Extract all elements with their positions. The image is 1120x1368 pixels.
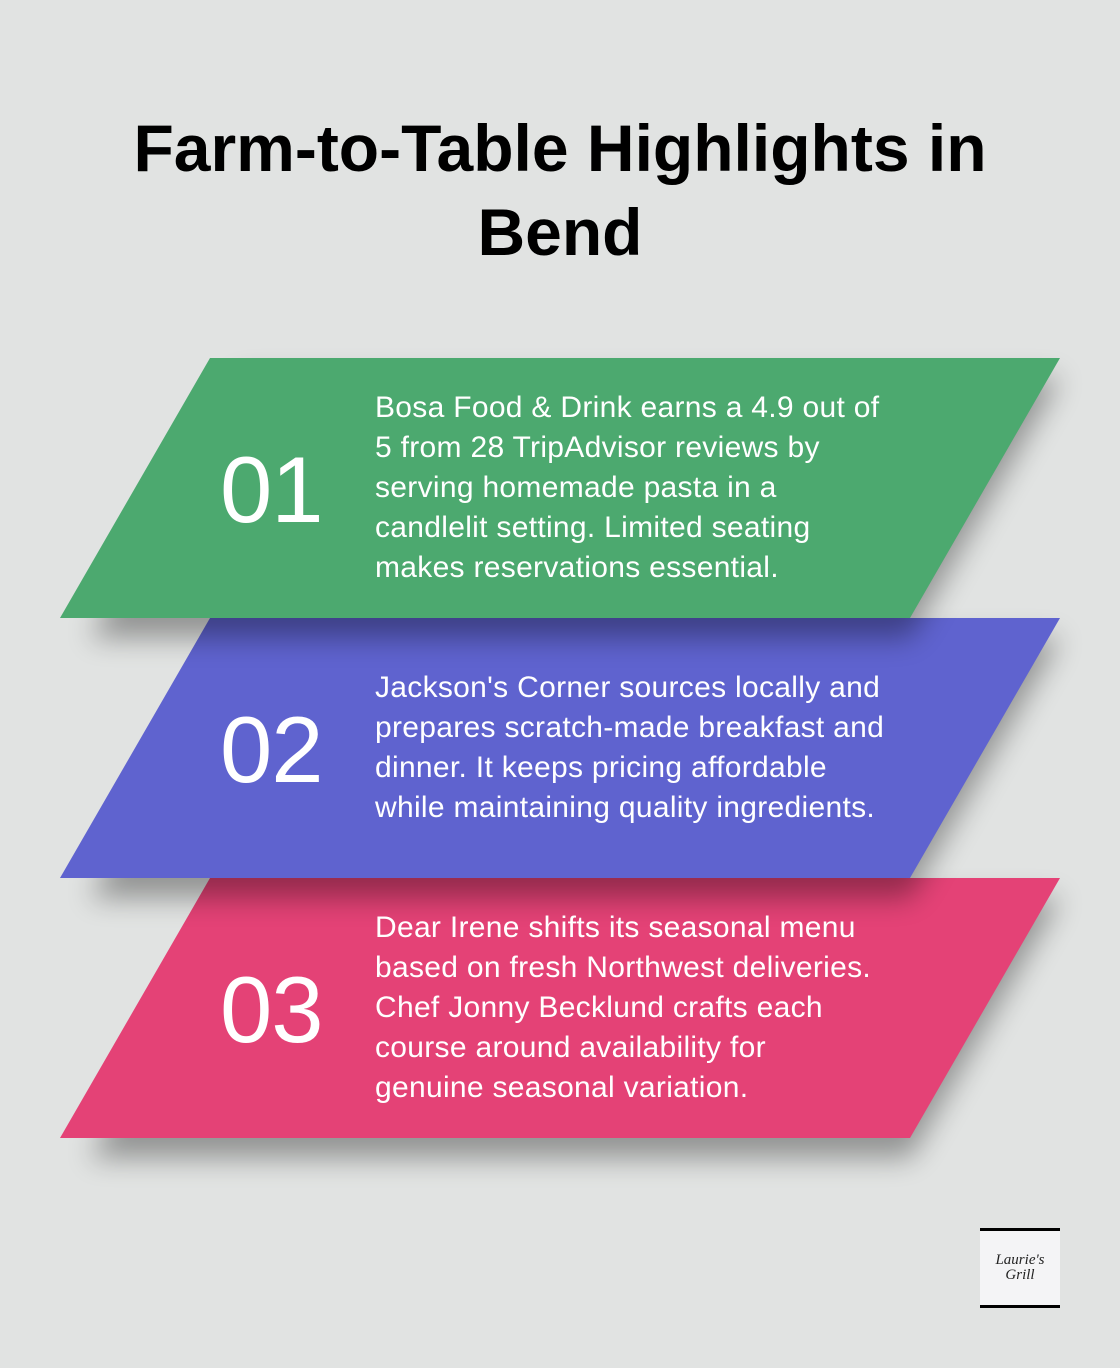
number 02: 02	[220, 697, 323, 802]
text 01: makes reservations essential.	[375, 551, 779, 584]
text 02: Jackson's Corner sources locally and	[375, 671, 880, 704]
text 01: 5 from 28 TripAdvisor reviews by	[375, 431, 820, 464]
band 3 shadow and shape	[60, 878, 1060, 1158]
logo	[980, 1228, 1060, 1308]
logo: Laurie's	[995, 1252, 1045, 1268]
number 03: 03	[220, 957, 323, 1062]
text 03	[375, 911, 871, 1104]
text 02: while maintaining quality ingredients.	[375, 791, 875, 824]
text 02: prepares scratch-made breakfast and	[375, 711, 884, 744]
text 03: Dear Irene shifts its seasonal menu	[375, 911, 856, 944]
band 1 shadow and shape	[60, 358, 1060, 638]
logo: Grill	[1005, 1267, 1035, 1283]
title: Bend	[478, 195, 642, 269]
text 03: genuine seasonal variation.	[375, 1071, 748, 1104]
band 2 shadow and shape	[60, 618, 1060, 898]
text 01: serving homemade pasta in a	[375, 471, 777, 504]
text 02: dinner. It keeps pricing affordable	[375, 751, 827, 784]
text 01: Bosa Food & Drink earns a 4.9 out of	[375, 391, 879, 424]
number 01: 01	[220, 437, 323, 542]
text 03: based on fresh Northwest deliveries.	[375, 951, 871, 984]
text 03: Chef Jonny Becklund crafts each	[375, 991, 823, 1024]
text 03: course around availability for	[375, 1031, 766, 1064]
text 01: candlelit setting. Limited seating	[375, 511, 810, 544]
title	[133, 111, 987, 269]
text 01	[375, 391, 880, 584]
title: Farm-to-Table Highlights in	[133, 111, 987, 185]
text 02	[375, 671, 884, 824]
